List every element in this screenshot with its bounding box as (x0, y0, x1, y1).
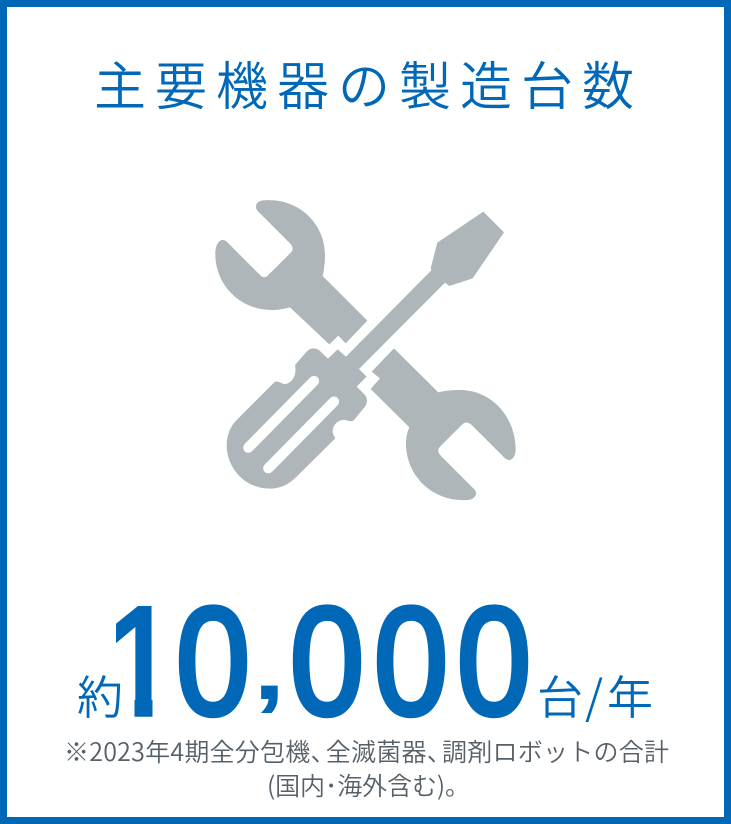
big number 10,000: 0 (374, 576, 448, 747)
footnote: (国内･海外含む)。 (267, 767, 470, 803)
unit: units per year (537, 662, 653, 728)
big number 10,000: 0 (176, 576, 250, 747)
footnote: ※2023年4期全分包機、全滅菌器、調剤ロボットの合計 (64, 733, 669, 769)
big number 10,000: 1 (105, 576, 177, 747)
unit: units per year: 年 (607, 662, 653, 728)
unit: units per year: / (585, 662, 603, 728)
title: 主要機器の製造台数 (94, 45, 643, 120)
big number 10,000: , (253, 619, 286, 719)
icon: crossed wrench and screwdriver (215, 200, 516, 500)
text: about prefix: 約 (77, 662, 123, 728)
footnote (64, 733, 669, 803)
unit: units per year: 台 (537, 662, 583, 728)
big number 10,000: 0 (290, 576, 364, 747)
big number 10,000 (98, 576, 531, 747)
big number 10,000: 0 (457, 576, 531, 747)
